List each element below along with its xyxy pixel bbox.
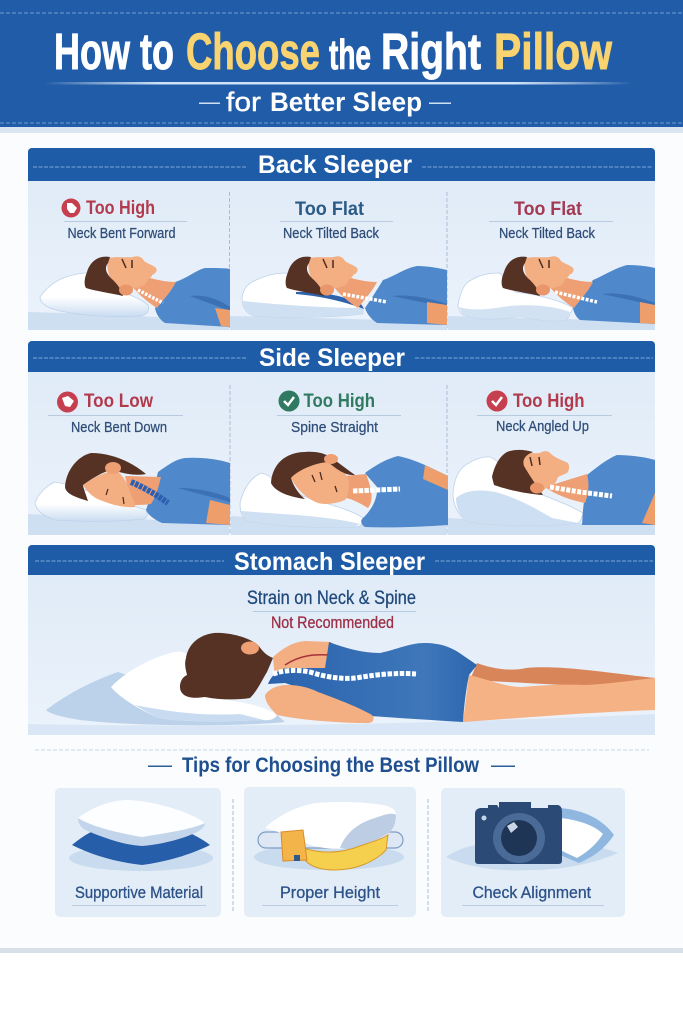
icon: camera and pillow bbox=[446, 802, 618, 870]
tip card: check alignment bbox=[441, 788, 625, 917]
column: too high: Too High bbox=[86, 198, 155, 219]
warning text bbox=[247, 588, 416, 632]
heading: side sleeper: Side Sleeper bbox=[259, 344, 405, 372]
illustration: flat pillow back sleeper bbox=[242, 256, 447, 325]
heading: back sleeper: Back Sleeper bbox=[258, 151, 412, 179]
bottom edge line bbox=[0, 948, 683, 953]
tip card: supportive material: Supportive Material bbox=[75, 883, 203, 902]
column: too low: Too Low bbox=[84, 391, 153, 412]
column: too high angled: Neck Angled Up bbox=[496, 418, 589, 435]
panel: stomach sleeper bbox=[28, 545, 655, 735]
heading: stomach sleeper: Stomach Sleeper bbox=[234, 548, 425, 576]
column: too flat 2: Neck Tilted Back bbox=[499, 225, 595, 242]
illustration: stomach sleeper figure bbox=[46, 633, 655, 725]
title bbox=[54, 23, 612, 80]
column: too high angled: Too High bbox=[513, 391, 584, 412]
title: Pillow bbox=[494, 23, 612, 80]
column: too high angled bbox=[477, 390, 612, 435]
subtitle: for bbox=[226, 87, 261, 117]
tip card: proper height: Proper Height bbox=[280, 883, 380, 902]
title: Right bbox=[381, 23, 481, 80]
panel: side sleeper bbox=[28, 341, 655, 535]
subtitle bbox=[199, 87, 451, 117]
icon: stacked pillows bbox=[69, 800, 213, 871]
illustration: side sleeper high pillow bbox=[453, 450, 655, 526]
tip card: check alignment: Check Alignment bbox=[472, 883, 591, 902]
title: the bbox=[329, 31, 371, 78]
icon: pillow and measuring tape bbox=[254, 802, 404, 870]
illustration: floor band bbox=[28, 514, 655, 535]
column: too low bbox=[48, 391, 183, 436]
column: too high correct: Spine Straight bbox=[291, 419, 379, 436]
column: too high correct bbox=[277, 390, 401, 436]
heading: tips: Tips for Choosing the Best Pillow bbox=[182, 754, 480, 777]
subtitle: Better Sleep bbox=[270, 87, 422, 117]
column: too flat 2: Too Flat bbox=[514, 199, 583, 220]
column: too high bbox=[62, 198, 187, 242]
title: How to bbox=[54, 23, 174, 80]
illustration: floor bbox=[28, 714, 655, 735]
panel: back sleeper bbox=[28, 148, 655, 330]
illustration: side sleeper low pillow bbox=[35, 453, 230, 525]
column: too low: Neck Bent Down bbox=[71, 419, 167, 436]
header banner bbox=[0, 0, 683, 133]
column: too flat 1: Too Flat bbox=[295, 199, 365, 220]
column: too flat 2 bbox=[489, 199, 613, 242]
divider bbox=[35, 749, 649, 751]
illustration: contour pillow back sleeper bbox=[458, 256, 655, 324]
illustration: floor band bbox=[28, 312, 655, 330]
title: Choose bbox=[186, 23, 320, 80]
warning text: Not Recommended bbox=[271, 614, 394, 632]
column: too flat 1: Neck Tilted Back bbox=[283, 225, 379, 242]
illustration: high pillow back sleeper bbox=[40, 256, 230, 327]
tip card: proper height bbox=[244, 787, 416, 917]
illustration: side sleeper correct pillow bbox=[240, 452, 448, 527]
tip card: supportive material bbox=[55, 788, 221, 917]
column: too high: Neck Bent Forward bbox=[68, 225, 176, 242]
column: too high correct: Too High bbox=[304, 391, 375, 412]
warning text: Strain on Neck & Spine bbox=[247, 588, 416, 609]
column: too flat 1 bbox=[280, 199, 393, 242]
